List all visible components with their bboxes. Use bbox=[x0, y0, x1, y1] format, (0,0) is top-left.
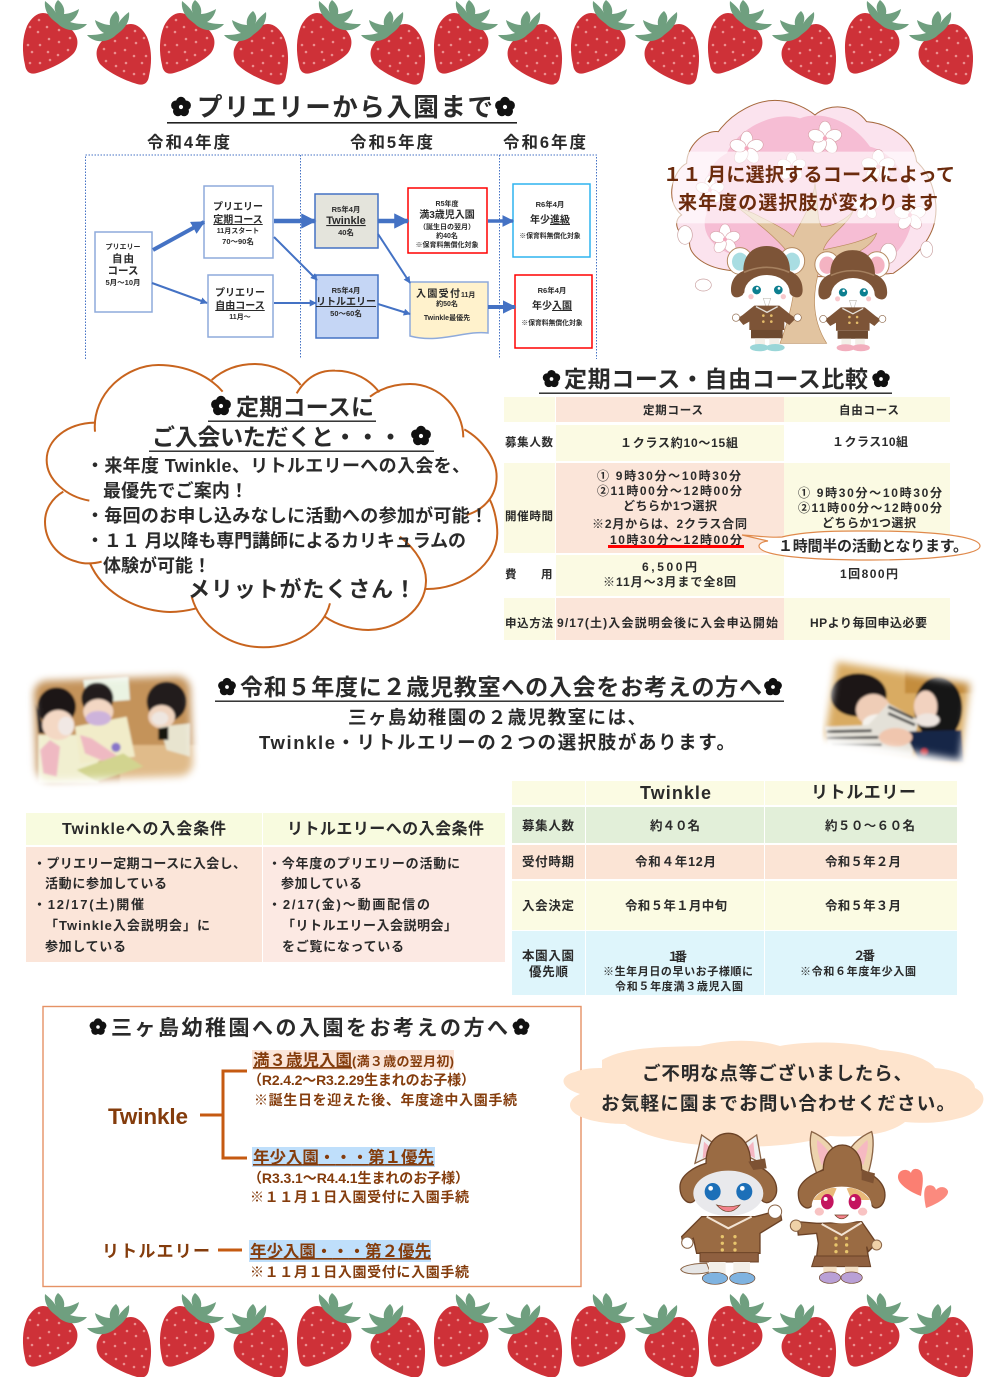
icon: flower left bbox=[171, 97, 191, 116]
box: admission reception: Twinkle最優先 bbox=[424, 313, 470, 322]
cloud benefit list: ・毎回のお申し込みなしに活動への参加が可能！ bbox=[86, 505, 488, 526]
Twinkle conditions: 参加している bbox=[45, 939, 126, 954]
box: admission reception bbox=[410, 282, 488, 339]
free course column: HPより毎回申込必要 bbox=[810, 615, 927, 630]
icon: flower bbox=[543, 370, 560, 387]
Twinkle conditions bbox=[33, 819, 246, 954]
Twinkle conditions: 「Twinkle入会説明会」に bbox=[45, 918, 210, 933]
year headers: 令和4年度 bbox=[147, 132, 230, 152]
box: free course from November: 自由コース bbox=[215, 299, 265, 312]
box: promotion: ※保育料無償化対象 bbox=[519, 231, 581, 240]
first-year first priority: ※１１月１日入園受付に入園手続 bbox=[250, 1189, 469, 1205]
box: regular course: 11月スタート bbox=[217, 226, 259, 235]
contact speech cloud bbox=[564, 1041, 983, 1147]
box: free course from November bbox=[208, 275, 273, 337]
intro text: two options bbox=[259, 707, 735, 753]
cloud heading: ご入会いただくと・・・ bbox=[152, 424, 402, 450]
Little Airy column: 令和５年２月 bbox=[825, 854, 901, 869]
Little Airy column: リトルエリー bbox=[811, 783, 916, 802]
icon: flower bbox=[872, 370, 890, 387]
Twinkle branch: Twinkle bbox=[108, 1104, 188, 1129]
row labels: 募集人数 bbox=[522, 818, 574, 833]
age 3 entry: (満３歳の翌月初) bbox=[352, 1054, 454, 1069]
arrows bbox=[152, 221, 515, 314]
strawberry border: top bbox=[23, 0, 973, 85]
box: promotion bbox=[513, 184, 590, 257]
first-year second priority: 年少入園・・・第２優先 bbox=[250, 1241, 431, 1261]
regular course column: 定期コース bbox=[643, 403, 703, 417]
cloud benefit list: ・来年度 Twinkle、リトルエリーへの入会を、 bbox=[86, 455, 470, 476]
box: Twinkle: Twinkle bbox=[326, 215, 366, 227]
row labels: 用 bbox=[541, 568, 552, 581]
Twinkle column: ※生年月日の早いお子様順に bbox=[603, 964, 753, 978]
age 3 entry: 満３歳児入園 bbox=[253, 1050, 352, 1070]
first-year first priority: （R3.3.1～R4.4.1生まれのお子様） bbox=[248, 1170, 469, 1186]
row labels: 優先順 bbox=[529, 964, 568, 979]
row labels bbox=[505, 435, 554, 630]
cloud benefit list: 最優先でご案内！ bbox=[103, 480, 248, 501]
box: admission reception: 約50名 bbox=[436, 299, 458, 308]
regular course column bbox=[557, 403, 778, 630]
cloud benefit list bbox=[86, 455, 488, 576]
icon: flower bbox=[90, 1018, 106, 1035]
trunk bbox=[737, 183, 877, 343]
contact speech cloud: お気軽に園までお問い合わせください。 bbox=[601, 1093, 955, 1114]
intro text: two options: Twinkle・リトルエリーの２つの選択肢があります。 bbox=[259, 732, 735, 753]
box: age 3 entry: R5年度 bbox=[436, 199, 458, 208]
Little Airy column bbox=[800, 783, 916, 978]
box: regular course: 70～90名 bbox=[222, 236, 254, 246]
box: free course bbox=[95, 232, 152, 312]
box: Little Airy: 50～60名 bbox=[330, 308, 362, 318]
box: Little Airy: リトルエリー bbox=[316, 297, 376, 308]
free course column: １クラス10組 bbox=[832, 434, 908, 449]
free course column: ① 9時30分～10時30分 bbox=[798, 485, 942, 500]
cherry tree illustration with message bbox=[663, 100, 955, 351]
box: first-year entry: R6年4月 bbox=[538, 285, 566, 295]
Twinkle column: 令和５年１月中旬 bbox=[625, 898, 727, 913]
row labels: 費 bbox=[505, 567, 516, 581]
box: Little Airy bbox=[316, 275, 378, 338]
box: Twinkle: 40名 bbox=[338, 227, 354, 237]
row labels: 募集人数 bbox=[505, 435, 554, 449]
box: promotion: 年少進級 bbox=[530, 213, 570, 226]
box: first-year entry bbox=[515, 275, 592, 348]
photo: children with puzzle bbox=[27, 667, 200, 790]
Twinkle conditions: ・プリエリー定期コースに入会し、 bbox=[33, 856, 246, 871]
box: age 3 entry: 満3歳児入園 bbox=[419, 208, 475, 221]
free course column: 自由コース bbox=[839, 403, 899, 417]
age 3 entry bbox=[248, 1050, 517, 1108]
flow diagram: pre-entry to admission bbox=[86, 132, 596, 359]
Little Airy column: ※令和６年度年少入園 bbox=[800, 964, 916, 978]
icon: flower right bbox=[495, 97, 515, 116]
row labels: 本園入園 bbox=[522, 948, 574, 963]
Twinkle column bbox=[603, 783, 753, 993]
heading: course comparison: 定期コース・自由コース比較 bbox=[564, 366, 868, 392]
first-year second priority bbox=[249, 1240, 469, 1280]
regular course column: 10時30分～12時00分 bbox=[610, 532, 742, 547]
icon: hearts bbox=[898, 1169, 948, 1208]
comparison table: Twinkle vs Little Airy bbox=[512, 781, 957, 995]
box: admission reception: 入園受付 bbox=[416, 287, 460, 300]
conditions table bbox=[26, 813, 505, 962]
white message band bbox=[673, 152, 939, 223]
regular course column: 9/17(土)入会説明会後に入会申込開始 bbox=[557, 615, 778, 630]
Twinkle column: Twinkle bbox=[640, 783, 711, 803]
message text bbox=[663, 164, 955, 214]
Little Airy conditions bbox=[268, 819, 484, 954]
box: free course: 5月～10月 bbox=[105, 278, 141, 287]
Twinkle conditions: 活動に参加している bbox=[45, 876, 167, 891]
icon: flower bbox=[764, 678, 782, 695]
first-year second priority: ※１１月１日入園受付に入園手続 bbox=[250, 1264, 469, 1280]
cloud benefit list: ・１１ 月以降も専門講師によるカリキュラムの bbox=[86, 531, 466, 551]
cloud closing line: メリットがたくさん！ bbox=[188, 577, 416, 602]
Twinkle branch bbox=[108, 1071, 247, 1158]
table cells bbox=[504, 397, 950, 640]
Little Airy conditions: リトルエリーへの入会条件 bbox=[287, 819, 484, 838]
icon: flower bbox=[411, 426, 431, 445]
row labels: 申込方法 bbox=[505, 616, 554, 630]
blossoms bbox=[807, 121, 843, 156]
icon: flower bbox=[211, 396, 231, 415]
Little Airy conditions: 参加している bbox=[281, 876, 362, 891]
Twinkle column: １番 bbox=[667, 950, 687, 964]
callout: one and a half hours: １時間半の活動となります。 bbox=[778, 537, 968, 555]
strawberry border: bottom bbox=[23, 1293, 973, 1377]
row labels bbox=[522, 818, 574, 979]
Little Airy column: 令和５年３月 bbox=[825, 898, 901, 913]
box: Twinkle: R5年4月 bbox=[332, 204, 360, 214]
icon: flower bbox=[513, 1018, 529, 1035]
box: free course from November: プリエリー bbox=[215, 287, 265, 299]
box: first-year entry: 年少入園 bbox=[532, 299, 572, 312]
first-year first priority: 年少入園・・・第１優先 bbox=[253, 1147, 434, 1167]
panel heading: 三ヶ島幼稚園への入園をお考えの方へ bbox=[111, 1017, 508, 1040]
free course column: 1回800円 bbox=[840, 567, 898, 581]
free course column bbox=[798, 403, 942, 630]
box: admission reception: 11月 bbox=[461, 291, 475, 299]
contact speech cloud: ご不明な点等ございましたら、 bbox=[642, 1063, 912, 1084]
cloud outline bbox=[45, 364, 497, 647]
cloud benefit list: 体験が可能！ bbox=[103, 555, 211, 576]
row labels: 開催時間 bbox=[505, 509, 553, 523]
Little Airy conditions: ・2/17(金)～動画配信の bbox=[268, 897, 430, 912]
age 3 entry: （R2.4.2～R3.2.29生まれのお子様） bbox=[248, 1072, 475, 1088]
box: age 3 entry: 約40名 bbox=[436, 231, 458, 240]
first-year first priority bbox=[248, 1147, 469, 1205]
regular course column: ① 9時30分～10時30分 bbox=[597, 468, 741, 483]
free course column: どちらか1つ選択 bbox=[822, 515, 916, 530]
box: regular course: 定期コース bbox=[213, 213, 263, 226]
message text: １１ 月に選択するコースによって bbox=[663, 164, 955, 186]
mascot pair bbox=[727, 246, 889, 351]
mascot: cat bbox=[680, 1133, 782, 1284]
box: Little Airy: R5年4月 bbox=[332, 285, 360, 295]
comparison table: regular vs free course bbox=[504, 397, 980, 640]
regular course column: ②11時00分～12時00分 bbox=[597, 483, 742, 498]
title: from pre-entry to admission: プリエリーから入園まで bbox=[197, 94, 493, 122]
row labels: 入会決定 bbox=[522, 898, 574, 913]
cells bbox=[512, 781, 957, 995]
panel: kindergarten admission bbox=[43, 1006, 581, 1286]
box: regular course: プリエリー bbox=[213, 201, 263, 213]
message text: 来年度の選択肢が変わります bbox=[678, 191, 938, 214]
box: age 3 entry: ※保育料無償化対象 bbox=[416, 240, 478, 249]
callout: one and a half hours bbox=[742, 531, 980, 560]
Twinkle column: 約４０名 bbox=[650, 818, 700, 833]
box: age 3 entry: （誕生日の翌月） bbox=[419, 222, 475, 231]
Twinkle conditions: Twinkleへの入会条件 bbox=[62, 819, 226, 838]
box: free course: プリエリー bbox=[106, 243, 140, 251]
Little Airy conditions: をご覧になっている bbox=[282, 939, 404, 954]
Twinkle column: 令和４年12月 bbox=[635, 854, 716, 869]
cloud heading bbox=[149, 394, 434, 452]
photo: teacher and child bbox=[822, 656, 976, 765]
year headers: 令和6年度 bbox=[503, 132, 586, 152]
conditions table: cells bbox=[26, 813, 505, 962]
box: free course from November: 11月～ bbox=[229, 313, 251, 321]
year headers: 令和5年度 bbox=[350, 132, 434, 152]
box: first-year entry: ※保育料無償化対象 bbox=[521, 318, 583, 327]
regular course column: 6,500円 bbox=[642, 560, 697, 574]
Twinkle column: 令和５年度満３歳児入園 bbox=[615, 979, 743, 993]
Twinkle conditions: ・12/17(土)開催 bbox=[33, 897, 144, 912]
box: Twinkle bbox=[315, 194, 378, 248]
regular course column: ※2月からは、2クラス合同 bbox=[592, 516, 747, 531]
Little Airy conditions: ・今年度のプリエリーの活動に bbox=[268, 856, 460, 871]
box: free course: 自由 bbox=[112, 252, 134, 265]
age 3 entry: ※誕生日を迎えた後、年度途中入園手続 bbox=[254, 1092, 517, 1108]
regular course column: ※11月～3月まで全8回 bbox=[603, 574, 736, 589]
year headers bbox=[147, 132, 586, 152]
box: promotion: R6年4月 bbox=[536, 199, 564, 209]
regular course column: １クラス約10～15組 bbox=[620, 435, 738, 450]
Little Airy column: ２番 bbox=[853, 949, 875, 963]
box: age 3 entry bbox=[408, 188, 487, 253]
row labels: 受付時期 bbox=[522, 854, 574, 869]
free course column: ②11時00分～12時00分 bbox=[798, 500, 942, 515]
Little Airy column: 約５０～６０名 bbox=[825, 818, 915, 833]
heading: 2-year-old classes: 令和５年度に２歳児教室への入会をお考えの方へ bbox=[240, 674, 762, 700]
intro text: two options: 三ヶ島幼稚園の２歳児教室には、 bbox=[348, 707, 646, 728]
icon: flower bbox=[218, 678, 236, 695]
Little Airy conditions: 「リトルエリー入会説明会」 bbox=[282, 918, 457, 933]
box: free course: コース bbox=[108, 265, 138, 277]
cloud panel: regular course benefits bbox=[45, 364, 497, 647]
Little Airy branch: リトルエリー bbox=[102, 1242, 210, 1261]
tree cloud bbox=[672, 100, 936, 277]
cloud heading: 定期コースに bbox=[236, 394, 374, 420]
box: regular course bbox=[204, 186, 273, 258]
mascot: rabbit bbox=[790, 1132, 885, 1283]
regular course column: どちらか1つ選択 bbox=[623, 498, 717, 513]
